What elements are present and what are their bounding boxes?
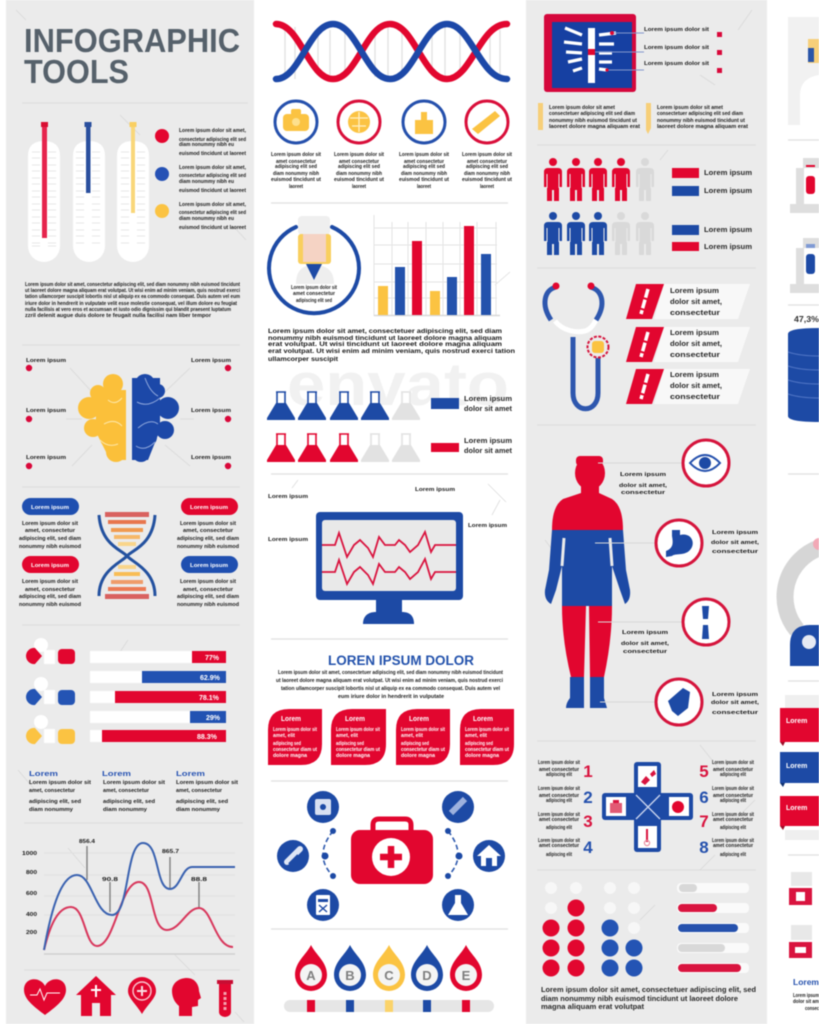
red cards: consectetur diam ut [336,747,380,753]
intro paragraph: Lorem ipsum dolor sit amet, consectetur adipiscing elit, sed diam nonummy nibh euismod tincidunt [25,282,240,288]
right column ribbon tags: Lorem [786,805,807,812]
section paragraph [276,670,503,700]
x-ray labels: Lorem ipsum dolor sit [644,45,709,51]
three column notes: Lorem [29,771,58,778]
red cards: dolore magna [401,753,435,759]
icon circles row [275,101,508,143]
icon: head [172,978,201,1016]
icon captions: diam nonummy nibh [273,171,319,177]
three column notes: Lorem [102,771,131,778]
red cards: amet, elit [273,733,295,739]
people pictogram blue: Lorem ipsum [704,227,752,234]
cross diagram [602,762,693,852]
intro paragraph: iriure dolor in hendrerit in vulputate velit esse molestie consequat, vel illum dolore eu feugiat [25,301,237,307]
small DNA helix [99,512,155,599]
people pictogram red: Lorem ipsum [704,188,752,195]
body captions: Lorem ipsum [712,530,758,536]
x-ray labels: Lorem ipsum dolor sit [644,27,709,33]
icon captions: laoreet [417,184,431,190]
red cards: Lorem [409,716,429,723]
right column cylinder: 47,3% [794,315,819,324]
icon captions: euismod tincidunt ut [462,177,512,183]
body captions: dolor sit amet, [711,540,759,546]
icon captions: adipiscing elit sed [403,164,445,170]
ECG monitor [316,512,463,624]
brain labels: Lorem ipsum [26,455,66,461]
stethoscope tags: dolor sit amet, [670,383,722,390]
icon captions: diam nonummy nibh [401,171,447,177]
DNA callouts right: adipiscing elit, sed diam [177,536,239,542]
progress bars with capsule icons: 62.9% [200,675,221,682]
people pictogram blue: Lorem ipsum [704,244,752,251]
flask pictogram row red [267,433,513,462]
numbered list left: Lorem ipsum dolor sit [538,812,580,818]
blood type drops: A [306,968,316,983]
numbered list left: adipiscing elit [546,852,572,858]
large DNA helix [276,24,507,79]
dot pictogram [542,882,642,976]
stethoscope tags [626,284,750,404]
DNA callouts right [177,498,239,608]
middle paragraph: Lorem ipsum dolor sit amet, consectetuer adipiscing elit, sed diam [268,328,502,335]
thermometers [28,122,149,262]
numbered list left: 3 [583,812,593,831]
middle paragraph: erat volutpat. Ut wisi enim ad minim veniam, quis nostrud exerci tation [268,348,515,355]
blood type drops: C [384,968,394,983]
red cards: Lorem [473,716,493,723]
brain labels: Lorem ipsum [191,408,231,414]
thermometer legend: diam nonummy nibh eu [179,216,234,222]
numbered list right: adipiscing elit [720,798,746,804]
yellow marked notes: laoreet dolore magna aliquam erat [657,124,748,130]
red cards: adipiscing sed [336,741,364,747]
brain labels: Lorem ipsum [191,455,231,461]
numbered list right: 8 [699,838,709,857]
progress bars with capsule icons: 88.3% [197,734,218,741]
numbered list right: adipiscing elit [720,852,746,858]
DNA callouts right: Lorem ipsum [190,505,228,511]
x-ray labels: Lorem ipsum dolor sit [644,61,709,67]
x-ray panel [544,14,644,92]
line chart [22,839,235,954]
numbered list left: adipiscing elit [546,798,572,804]
bottom paragraph [541,987,756,1011]
intro paragraph: tation ullamcorper suscipit lobortis nisl ut aliquip ex ea commodo consequat. Duis autem vel eum [25,294,240,300]
body captions: Lorem ipsum [622,630,668,636]
x-ray labels [644,27,722,73]
line chart: 88.8 [191,877,208,883]
yellow marked notes: consectetuer adipiscing elit sed diam [657,111,743,117]
red cards: consectetur diam ut [273,747,317,753]
numbered list right: adipiscing elit [720,772,746,778]
brain labels: Lorem ipsum [191,358,231,364]
DNA callouts left: amet, consectetur [25,528,76,534]
numbered list right: 5 [699,762,709,781]
DNA callouts right: adipiscing elit, sed diam [177,594,239,600]
red cards: Lorem ipsum dolor sit [273,727,317,733]
small progress bars [677,883,749,973]
intro paragraph: nulla facilisis at vero eros et accumsan et iusto odio dignissim qui blandit praesent luptatum [25,307,231,313]
three column notes: Lorem ipsum dolor sit [176,780,238,786]
DNA callouts right: nonummy nibh euismod [177,602,239,608]
bottom paragraph: Lorem ipsum dolor sit amet, consectetuer adipiscing elit, sed [541,987,756,994]
thermometer legend: Lorem ipsum dolor sit amet, [179,165,246,171]
yellow marked notes: consectetuer adipiscing elit sed diam [549,111,635,117]
blood type drops: B [345,968,355,983]
middle paragraph: erat volutpat. Ut wisi tincidunt ut laoreet dolore magna aliquam [268,341,502,348]
icon captions: diam nonummy nibh [336,171,382,177]
three column notes: adipiscing elit, sed [103,799,155,805]
blood type drops: D [422,968,432,983]
section heading: LOREN IPSUM DOLOR [328,653,474,668]
body captions: consectetur [712,549,759,555]
numbered list left: amet consectetur [539,793,580,799]
numbered list left: adipiscing elit [546,772,572,778]
body captions: dolor sit amet, [711,700,759,706]
DNA callouts left: adipiscing elit, sed diam [19,594,81,600]
red cards: adipiscing sed [401,741,429,747]
stethoscope tags: consectetur [670,352,720,359]
red cards: consectetur diam ut [465,747,509,753]
right column gauge fragment [785,538,819,666]
DNA callouts left [19,498,81,608]
line chart: 90.8 [102,877,119,883]
body captions: consectetur [623,649,668,655]
thermometer legend: consectetur adipiscing elit sed [179,137,246,143]
three column notes: Lorem ipsum dolor sit [103,780,165,786]
first aid kit [351,819,433,884]
icon captions: diam nonummy nibh [464,171,510,177]
red cards: amet, elit [401,733,423,739]
body captions: dolor sit amet, [619,483,667,489]
three column notes [29,771,238,813]
red cards: consectetur diam ut [401,747,445,753]
DNA callouts right: amet, consectetur [183,587,234,593]
three column notes: adipiscing elit, sed [29,799,81,805]
bottom paragraph: diam nonummy nibh euismod tincidunt ut laoreet dolore [541,996,738,1003]
yellow marked notes [538,103,748,134]
icon captions: laoreet [289,184,303,190]
numbered list right: Lorem ipsum dolor sit [712,760,754,766]
yellow marked notes: Lorem ipsum dolor sit amet [657,105,723,111]
monitor labels: Lorem ipsum [468,523,507,529]
numbered list left: Lorem ipsum dolor sit [538,838,580,844]
thermometer legend: Lorem ipsum dolor sit amet, [179,202,246,208]
DNA callouts left: Lorem ipsum [31,505,69,511]
numbered list left: adipiscing elit [546,825,572,831]
blood type scale [284,1000,494,1012]
people pictogram red [544,158,752,201]
blood type drops: E [462,968,471,983]
intro paragraph [25,282,240,319]
numbered list right [699,760,754,858]
intro paragraph: zzril delenit augue duis dolore te feugait nulla facilisi nam liber tempor [25,313,212,319]
brain labels: Lorem ipsum [26,408,66,414]
icon captions: euismod tincidunt ut [334,177,384,183]
red cards [268,709,514,765]
stethoscope [545,282,608,409]
icon captions: amet consectetur [276,159,317,165]
red cards: dolore magna [336,753,370,759]
stethoscope tags: Lorem ipsum [670,330,719,337]
section paragraph: tation ullamcorper suscipit lobortis nisl ut aliquip ex ea commodo consequat. Duis autem vel [281,686,500,692]
numbered list right: amet consectetur [713,843,754,849]
icon captions: laoreet [480,184,494,190]
middle paragraph: ullamcorper suscipit [268,356,339,363]
icon captions: Lorem ipsum dolor sit [334,152,384,158]
DNA callouts left: Lorem ipsum dolor sit [22,521,78,527]
brain labels: Lorem ipsum [26,358,66,364]
progress bars with capsule icons: 29% [206,715,221,722]
stethoscope tags: consectetur [670,310,720,317]
section paragraph: Lorem ipsum dolor sit amet, consectetuer adipiscing elit, sed diam nonummy nibh euismod tincidunt [278,670,503,676]
people pictogram blue [544,212,752,255]
monitor labels: Lorem ipsum [268,494,308,500]
numbered list left: amet consectetur [539,767,580,773]
thermometer legend: euismod tincidunt ut laoreet [179,151,246,157]
icon captions: adipiscing elit sed [466,164,508,170]
thermometer legend: Lorem ipsum dolor sit amet, [179,128,246,134]
three column notes: amet, consectetur [103,788,150,794]
icon: house [76,976,116,1016]
right column note: Lorem [793,978,819,987]
stethoscope tags: Lorem ipsum [670,372,719,379]
right column ribbon tags: Lorem [786,763,807,770]
numbered list left: 4 [583,838,593,857]
icon captions: amet consectetur [467,159,508,165]
brain diagram [66,368,194,466]
three column notes: Lorem ipsum dolor sit [29,780,91,786]
body captions: dolor sit amet, [621,641,669,647]
monitor labels [268,487,507,543]
red cards: amet, elit [336,733,358,739]
numbered list left: amet consectetur [539,843,580,849]
stethoscope tags: Lorem ipsum [670,288,719,295]
numbered list right: Lorem ipsum dolor sit [712,838,754,844]
body part circles [656,440,729,725]
doctor portrait: Lorem ipsum dolor sit [291,285,337,291]
right column note [793,978,819,1012]
title: INFOGRAPHIC [24,22,240,59]
line chart: 400 [26,912,37,918]
flask pictogram row red: Lorem ipsum [464,438,512,445]
middle paragraph [268,328,515,363]
icon captions: adipiscing elit sed [275,164,317,170]
body captions [619,472,759,716]
icon captions: laoreet [352,184,366,190]
right column small icons [789,872,812,958]
progress bars with capsule icons: 77% [205,655,220,662]
right column vials [790,158,819,293]
line chart: 865.7 [162,849,179,855]
thermometer legend: diam nonummy nibh eu [179,179,234,185]
three column notes: diam nonummy [103,807,148,813]
numbered list left [538,760,593,858]
icon captions: amet consectetur [339,159,380,165]
numbered list right: Lorem ipsum dolor sit [712,812,754,818]
red cards: dolore magna [273,753,307,759]
three column notes: diam nonummy [29,807,74,813]
numbered list right: amet consectetur [713,793,754,799]
doctor portrait [269,216,359,313]
DNA callouts left: Lorem ipsum [31,563,69,569]
doctor portrait: adipiscing elit sed [296,298,332,304]
DNA callouts left: Lorem ipsum dolor sit [22,579,78,585]
DNA callouts right: nonummy nibh euismod [177,544,239,550]
progress bars with capsule icons: 78.1% [199,695,220,702]
dotted arcs [322,828,462,879]
section paragraph: ut laoreet dolore magna aliquam erat volutpat. Ut wisi enim ad minim veniam, quis nostrud exerci [276,678,503,684]
numbered list left: Lorem ipsum dolor sit [538,786,580,792]
red cards: dolore magna [465,753,499,759]
stethoscope tags: consectetur [670,394,720,401]
numbered list right: amet consectetur [713,817,754,823]
body captions: Lorem ipsum [712,692,758,698]
right column ribbon tags: Lorem [786,718,807,725]
icon: test tube [217,980,233,1017]
numbered list right: 6 [699,788,709,807]
thermometer legend: euismod tincidunt ut laoreet [179,225,246,231]
stethoscope tags: dolor sit amet, [670,299,722,306]
three column notes: amet, consectetur [176,788,223,794]
bar chart [374,215,500,316]
thermometer legend: consectetur adipiscing elit sed [179,173,246,179]
icon: location pin [128,977,156,1014]
DNA callouts right: Lorem ipsum [190,563,228,569]
flask pictogram row blue [267,391,513,420]
three column notes: adipiscing elit, sed [176,799,228,805]
icon: heart [24,979,66,1015]
flask pictogram row blue: dolor sit amet [464,406,513,413]
right column doctor fragment [788,17,819,125]
line chart: 856.4 [79,839,96,845]
red cards: Lorem ipsum dolor sit [336,727,380,733]
thermometer legend [155,128,246,231]
numbered list left: 2 [583,788,593,807]
three column notes: diam nonummy [176,807,221,813]
DNA callouts right: amet, consectetur [183,528,234,534]
thermometer legend: consectetur adipiscing elit sed [179,210,246,216]
flask pictogram row blue: Lorem ipsum [464,396,512,403]
numbered list left: Lorem ipsum dolor sit [538,760,580,766]
yellow marked notes: nonummy nibh euismod tincidunt ut [549,118,637,124]
line chart: 600 [26,891,37,897]
red cards: adipiscing sed [273,741,301,747]
line chart: 200 [26,930,37,936]
three column notes: Lorem [176,771,205,778]
line chart: 800 [26,870,37,876]
thermometer legend: diam nonummy nibh eu [179,142,234,148]
monitor labels: Lorem ipsum [268,537,308,543]
satellite medical icons [277,791,505,921]
icon captions: adipiscing elit sed [338,164,380,170]
red cards: amet, elit [465,733,487,739]
body captions: consectetur [621,490,666,496]
human body figure [545,456,682,708]
title: TOOLS [24,53,129,90]
icon captions: Lorem ipsum dolor sit [399,152,449,158]
watermark: envato [287,351,509,418]
icon captions: Lorem ipsum dolor sit [462,152,512,158]
DNA callouts left: nonummy nibh euismod [19,602,81,608]
numbered list left: amet consectetur [539,817,580,823]
red cards: Lorem [345,716,365,723]
numbered list left: 1 [583,762,593,781]
line chart: 1000 [22,851,37,857]
DNA callouts left: nonummy nibh euismod [19,544,81,550]
yellow marked notes: nonummy nibh euismod tincidunt ut [657,118,745,124]
icon captions: amet consectetur [404,159,445,165]
bottom paragraph: magna aliquam erat volutpat [541,1004,645,1011]
yellow marked notes: Lorem ipsum dolor sit amet [549,105,615,111]
red cards: Lorem [281,716,301,723]
numbered list right: Lorem ipsum dolor sit [712,786,754,792]
red cards: adipiscing sed [465,741,493,747]
icon captions: euismod tincidunt ut [399,177,449,183]
thermometer legend: euismod tincidunt ut laoreet [179,188,246,194]
title [24,22,240,90]
DNA callouts right: Lorem ipsum dolor sit [180,579,236,585]
middle paragraph: nonummy nibh euismod tincidunt ut laoreet dolore magna aliquam [268,335,502,342]
people pictogram red: Lorem ipsum [704,170,752,177]
monitor labels: Lorem ipsum [415,487,455,493]
icon captions [271,152,512,190]
icon captions: euismod tincidunt ut [271,177,321,183]
yellow marked notes: laoreet dolore magna aliquam erat [549,124,640,130]
numbered list right: amet consectetur [713,767,754,773]
DNA callouts left: amet, consectetur [25,587,76,593]
section paragraph: eum iriure dolor in hendrerit in vulputate [338,694,445,700]
numbered list right: adipiscing elit [720,825,746,831]
icon captions: Lorem ipsum dolor sit [271,152,321,158]
stethoscope tags: dolor sit amet, [670,341,722,348]
red cards: Lorem ipsum dolor sit [401,727,445,733]
DNA callouts left: adipiscing elit, sed diam [19,536,81,542]
blood type drops [295,945,482,991]
body captions: consectetur [712,710,759,716]
body captions: Lorem ipsum [620,472,666,478]
right column cylinder [788,315,819,422]
progress bars with capsule icons [26,638,226,744]
doctor portrait: amet consectetur [293,291,336,297]
DNA callouts right: Lorem ipsum dolor sit [180,521,236,527]
brain labels [26,358,231,469]
numbered list right: 7 [699,812,709,831]
intro paragraph: ut laoreet dolore magna aliquam erat volutpat. Ut wisi enim ad minim veniam, quis nostrud exerci [25,288,240,294]
three column notes: amet, consectetur [29,788,76,794]
red cards: Lorem ipsum dolor sit [465,727,509,733]
flask pictogram row red: dolor sit amet [464,448,513,455]
right column ribbon tags [780,695,819,840]
